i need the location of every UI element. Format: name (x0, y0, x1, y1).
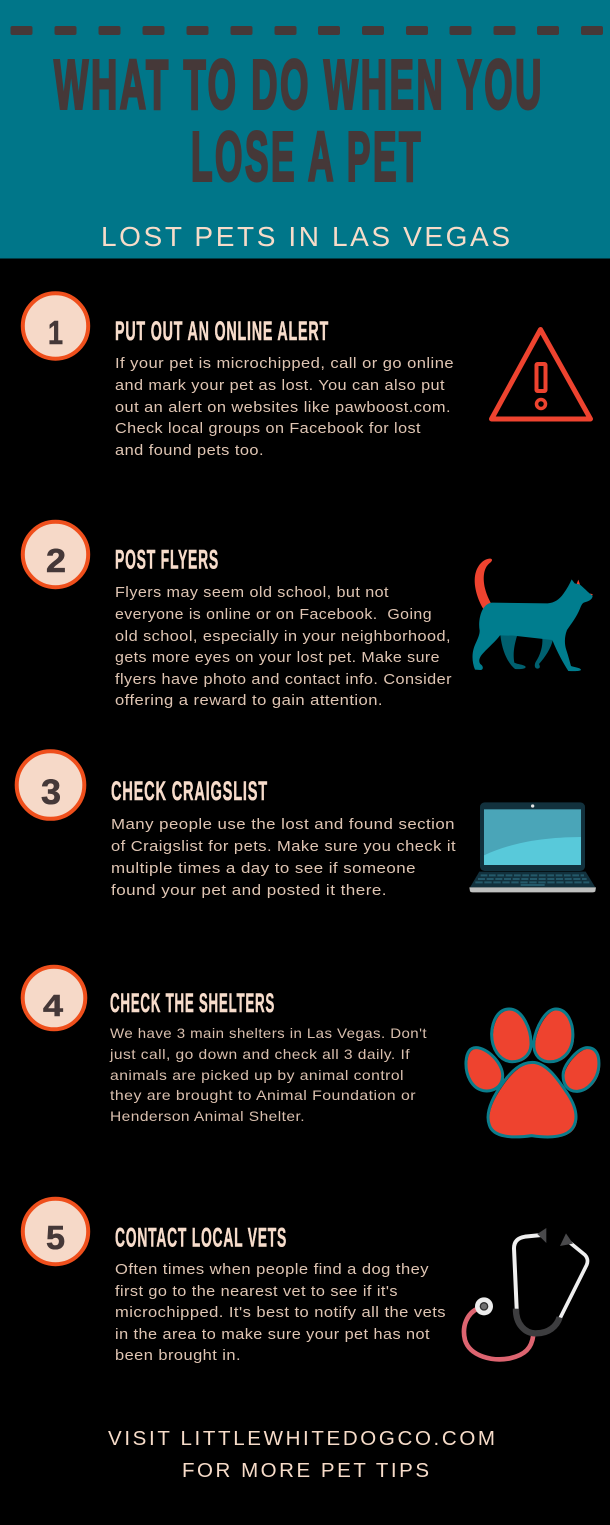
step 1 number badge (23, 293, 88, 359)
step 5 text: first go to the nearest vet to see if it's (115, 1284, 398, 1300)
step 3 text: multiple times a day to see if someone (111, 861, 416, 877)
panel: step 4: CHECK THE SHELTERS (110, 988, 275, 1018)
step 5 text: microchipped. It's best to notify all the vets (115, 1305, 446, 1321)
panel: step 3 (17, 751, 596, 899)
step 4 number badge: 4 (43, 988, 64, 1023)
panel: step 4 (23, 967, 600, 1138)
step 1 text: and mark your pet as lost. You can also put (115, 378, 445, 394)
step 1 text (115, 356, 454, 459)
icon: laptop (469, 802, 596, 892)
step 2 text: flyers have photo and contact info. Consider (115, 672, 452, 688)
footer call to action (108, 1427, 495, 1482)
panel: step 5 (23, 1199, 588, 1364)
step 3 number badge (17, 751, 84, 819)
step 5 text (115, 1262, 446, 1364)
step 5 heading: CONTACT LOCAL VETS (115, 1222, 287, 1252)
footer call to action: FOR MORE PET TIPS (182, 1459, 429, 1482)
footer call to action: VISIT LITTLEWHITEDOGCO.COM (108, 1427, 495, 1450)
step 1 heading: PUT OUT AN ONLINE ALERT (115, 316, 329, 346)
step 5 number badge: 5 (46, 1219, 65, 1256)
step 1 text: If your pet is microchipped, call or go online (115, 356, 454, 372)
step 4 text: animals are picked up by animal control (110, 1067, 404, 1083)
step 4 text (109, 1025, 427, 1124)
step 4 text: We have 3 main shelters in Las Vegas. Don't (110, 1025, 427, 1041)
step 2 number badge: 2 (46, 542, 66, 579)
title (54, 46, 544, 196)
panel: header banner (0, 0, 610, 258)
step 2 text (115, 585, 452, 709)
step 4 text: they are brought to Animal Foundation or (110, 1087, 416, 1103)
step 5 text: in the area to make sure your pet has not (115, 1327, 430, 1343)
icon: warning triangle (492, 330, 590, 419)
step 5 text: Often times when people find a dog they (115, 1262, 429, 1278)
step 5 number badge (23, 1199, 88, 1264)
step 1 text: out an alert on websites like pawboost.com. (115, 400, 451, 416)
panel: step 1 (23, 293, 591, 459)
panel: step 2 (23, 522, 593, 709)
step 1 text: and found pets too. (115, 443, 264, 459)
step 2 text: old school, especially in your neighborhood, (115, 629, 451, 645)
step 4 text: just call, go down and check all 3 daily. If (109, 1046, 410, 1062)
step 2 text: Flyers may seem old school, but not (115, 585, 389, 601)
icon: stethoscope (464, 1228, 588, 1359)
icon: paw print (466, 1009, 600, 1138)
icon: cat (473, 559, 593, 671)
step 3 number badge: 3 (41, 773, 61, 812)
step 4 number badge (23, 967, 85, 1029)
step 4 text: Henderson Animal Shelter. (110, 1108, 305, 1124)
step 1 number badge: 1 (48, 314, 63, 351)
step 2 text: gets more eyes on your lost pet. Make sure (115, 650, 440, 666)
step 3 text: Many people use the lost and found section (111, 817, 455, 833)
step 3 text (111, 817, 456, 899)
step 2 heading: POST FLYERS (115, 544, 219, 574)
subtitle: LOST PETS IN LAS VEGAS (101, 221, 510, 252)
step 3 heading: CHECK CRAIGSLIST (111, 776, 268, 806)
step 2 text: everyone is online or on Facebook. Going (115, 607, 432, 623)
step 3 text: found your pet and posted it there. (111, 883, 387, 899)
step 3 text: of Craigslist for pets. Make sure you check it (111, 839, 456, 855)
step 2 number badge (23, 522, 88, 587)
step 2 text: offering a reward to gain attention. (115, 693, 383, 709)
step 1 text: Check local groups on Facebook for lost (115, 421, 421, 437)
step 5 text: been brought in. (115, 1348, 241, 1364)
